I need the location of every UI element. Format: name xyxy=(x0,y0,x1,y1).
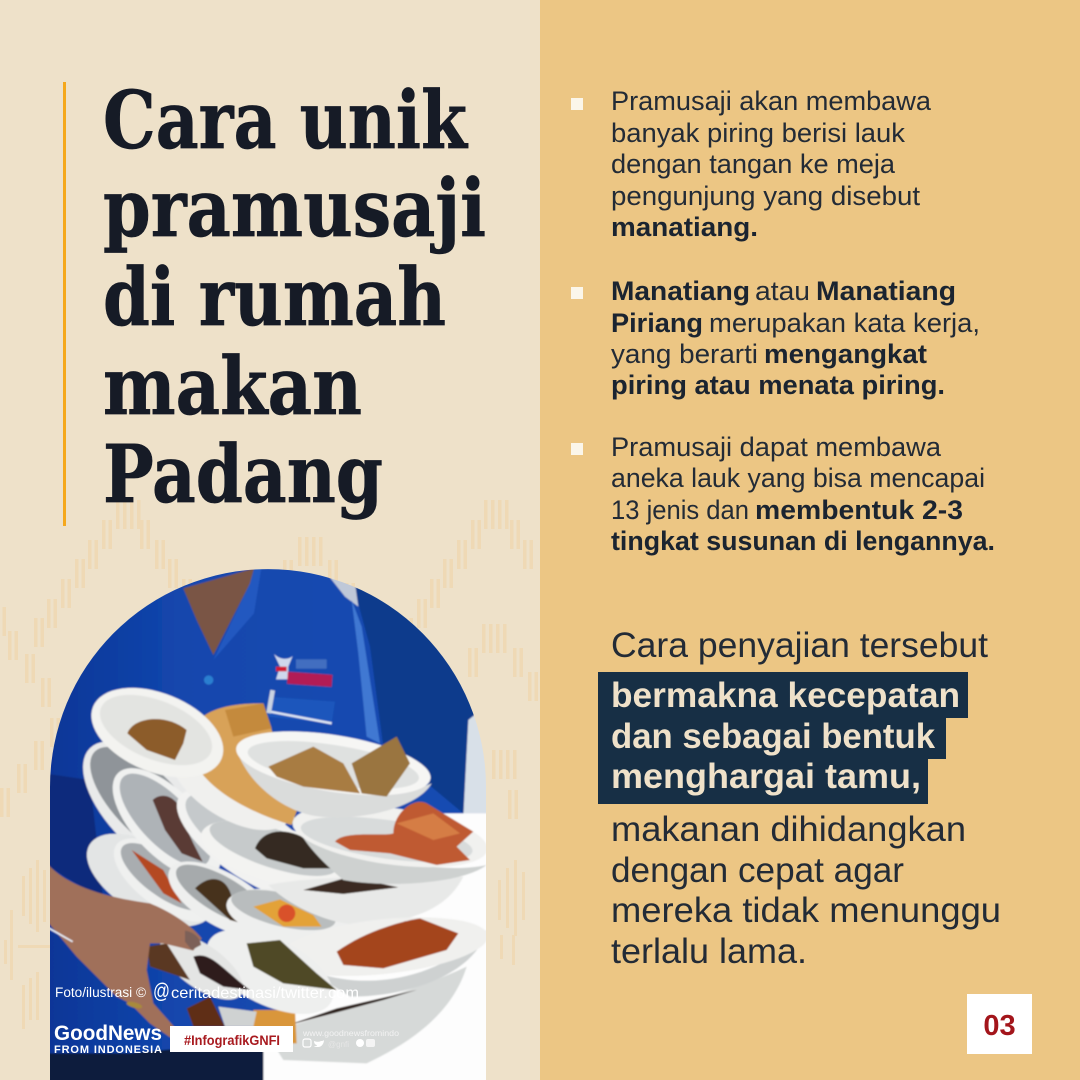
highlighted callout: menghargai tamu, xyxy=(611,757,921,796)
lower left plates xyxy=(206,930,333,1015)
website and social handles xyxy=(302,1028,399,1049)
GoodNews logo: FROM INDONESIA xyxy=(54,1044,162,1056)
bullet 3 text: tingkat susunan di lengannya. xyxy=(611,526,995,556)
photo: waiter carrying stacked plates xyxy=(43,553,497,1080)
callout closing text: terlalu lama. xyxy=(611,932,807,971)
bullet 3 text: Pramusaji dapat membawa xyxy=(611,432,941,462)
right panel background xyxy=(540,0,1080,1080)
bullet 2 text: Manatiang xyxy=(611,276,750,306)
bullet 3 text: 13 jenis dan xyxy=(611,495,749,525)
highlighted callout: bermakna kecepatan xyxy=(611,676,960,715)
callout intro: Cara penyajian tersebut xyxy=(611,626,988,665)
top bowl xyxy=(239,758,433,818)
bullet 2 text: merupakan kata kerja, xyxy=(709,308,980,338)
GoodNews logo: GoodNews xyxy=(54,1022,162,1045)
highlighted callout xyxy=(598,672,968,804)
crackers xyxy=(196,703,298,825)
website and social handles: www.goodnewsfromindo xyxy=(302,1028,399,1038)
stacked white bowls xyxy=(268,876,463,925)
bullet 2 text: Piriang xyxy=(611,308,703,338)
title: Cara unik xyxy=(103,73,468,167)
plate J: red food xyxy=(327,950,477,998)
hashtag badge xyxy=(170,1026,293,1052)
bullet 1 xyxy=(571,86,931,242)
bullet marker xyxy=(571,443,583,455)
plate I2: red food xyxy=(114,839,204,921)
neck xyxy=(183,568,254,655)
bullet 3 text: aneka lauk yang bisa mencapai xyxy=(611,463,985,493)
plate I1: lower rear left xyxy=(86,832,206,928)
bullet 3 text: membentuk 2-3 xyxy=(755,495,963,525)
shirt logo xyxy=(274,654,332,687)
title: di rumah xyxy=(103,250,446,344)
bullet 2 text: mengangkat xyxy=(764,339,927,369)
callout closing text: mereka tidak menunggu xyxy=(611,891,1001,930)
highlighted callout: dan sebagai bentuk xyxy=(611,717,936,756)
lower dark shirt area xyxy=(50,774,103,894)
bullet 3 text xyxy=(611,432,995,556)
photo credit xyxy=(55,980,359,1003)
left panel background xyxy=(0,0,540,1080)
callout closing text: makanan dihidangkan xyxy=(611,810,966,849)
title: Padang xyxy=(103,427,383,521)
plate C: fish xyxy=(112,767,221,869)
bullet 2 text: yang berarti xyxy=(611,339,758,369)
bullet 1 text: manatiang. xyxy=(611,212,758,242)
title: makan xyxy=(103,339,362,433)
bullet 1 text: pengunjung yang disebut xyxy=(611,181,921,211)
callout closing text: dengan cepat agar xyxy=(611,851,904,890)
bullet 1 text xyxy=(611,86,931,242)
page number xyxy=(967,994,1032,1054)
bullet 2 text: piring atau menata piring. xyxy=(611,370,945,400)
background pattern xyxy=(0,500,538,1029)
accent bar xyxy=(63,82,66,526)
bullet 1 text: Pramusaji akan membawa xyxy=(611,86,931,116)
bullet marker xyxy=(571,98,583,110)
plate I4: yellow food xyxy=(225,888,346,945)
photo credit: @ xyxy=(153,980,170,1003)
crackers plate xyxy=(177,774,287,831)
callout closing text xyxy=(611,810,1001,971)
GoodNews logo xyxy=(54,1022,162,1056)
bullet 3 xyxy=(571,432,995,556)
plate I3 xyxy=(168,860,255,932)
bullet 1 text: banyak piring berisi lauk xyxy=(611,118,906,148)
bullet 2 text xyxy=(611,276,980,400)
hand and arm xyxy=(43,858,202,1037)
plate G: red chicken xyxy=(293,817,487,884)
shirt xyxy=(50,569,464,1080)
website and social handles: @gnfi xyxy=(328,1040,349,1049)
background behind waiter xyxy=(356,588,474,813)
bullet marker xyxy=(571,287,583,299)
plate B: rear left xyxy=(82,741,188,837)
bottom stack bowls xyxy=(267,967,467,1063)
plate E xyxy=(176,793,292,890)
bullet 1 text: dengan tangan ke meja xyxy=(611,149,895,179)
collar and sleeve seam xyxy=(215,570,261,657)
title xyxy=(103,73,486,521)
hashtag badge: #InfografikGNFI xyxy=(184,1033,280,1048)
photo credit: ceritadestinasi/twitter.com xyxy=(171,985,359,1002)
pocket xyxy=(267,698,334,722)
plate F: fish xyxy=(201,823,341,884)
plate A: top left xyxy=(90,686,224,776)
bullet 2 text: Manatiang xyxy=(816,276,956,306)
bullet 2 xyxy=(571,276,980,400)
title: pramusaji xyxy=(103,161,486,255)
photo credit: Foto/ilustrasi © xyxy=(55,985,146,1000)
bullet 2 text: atau xyxy=(755,276,810,306)
page number: 03 xyxy=(983,1010,1016,1042)
